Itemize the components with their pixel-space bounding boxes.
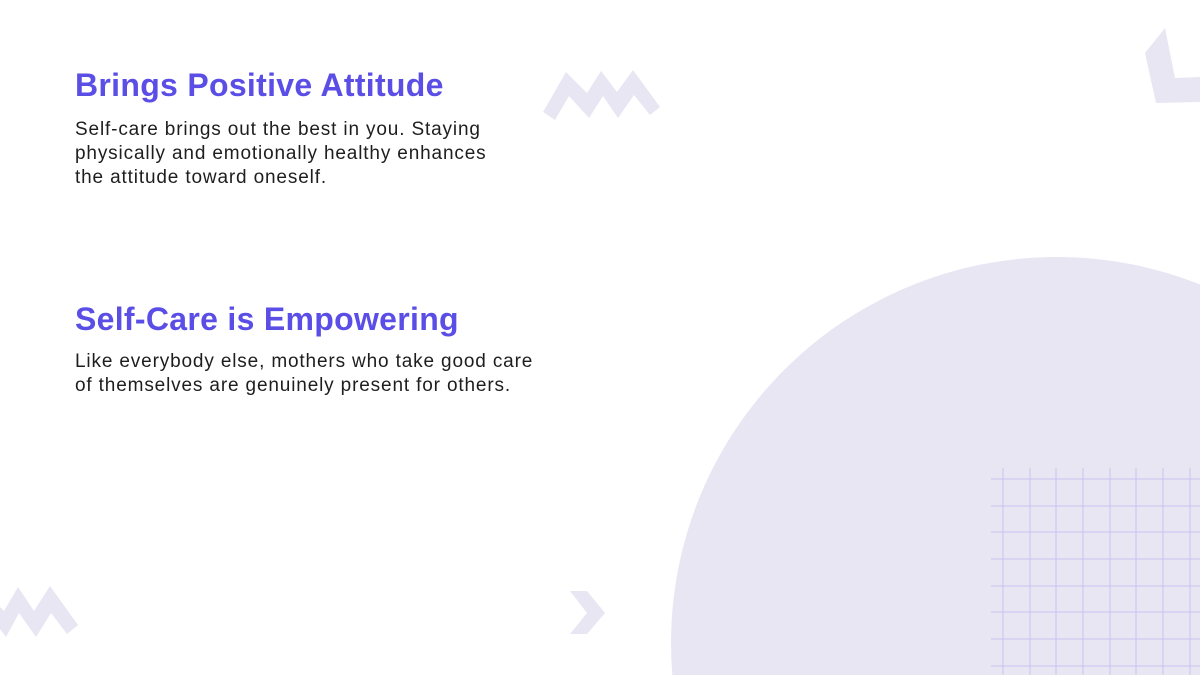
decorative circle [671, 257, 1200, 675]
text block: positive attitude [75, 119, 487, 188]
text block: positive attitude: Self-care brings out the best in you. Staying [75, 119, 481, 140]
text block: empowering: Like everybody else, mothers who take good care [75, 351, 533, 372]
text block: positive attitude: the attitude toward oneself. [75, 167, 327, 188]
zigzag top [543, 70, 660, 120]
text block: empowering [75, 351, 533, 396]
zigzag bottom left [0, 586, 78, 637]
text block: positive attitude: physically and emotionally healthy enhances [75, 143, 487, 164]
heading: Brings Positive Attitude: Brings Positive Attitude [75, 67, 444, 103]
heading: Self-Care is Empowering: Self-Care is Empowering [75, 301, 459, 337]
grid pattern [991, 468, 1200, 675]
chevron [570, 591, 605, 634]
L shape top right [1145, 28, 1200, 103]
text block: empowering: of themselves are genuinely present for others. [75, 375, 511, 396]
